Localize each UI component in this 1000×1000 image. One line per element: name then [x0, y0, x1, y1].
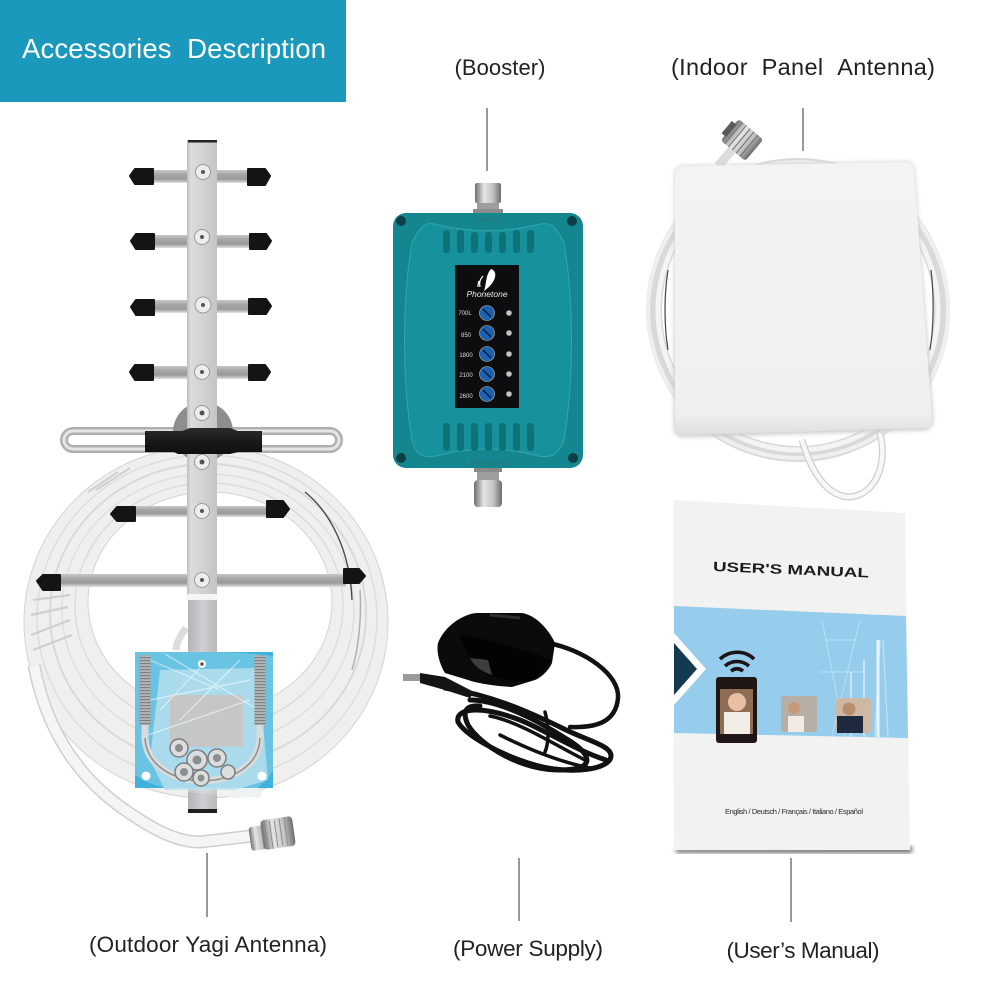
- mast zip tie: [186, 594, 218, 600]
- mounting holes: [142, 660, 266, 780]
- mounting hardware bag: [135, 650, 273, 798]
- manual photo: [836, 698, 871, 733]
- cable N connector: [248, 816, 296, 851]
- mast: [187, 140, 217, 596]
- top vents: [443, 230, 534, 253]
- adapter: [437, 613, 555, 687]
- cable coil: outdoor antenna: [24, 446, 388, 842]
- user's manual: [673, 500, 912, 853]
- power cord: [445, 643, 618, 770]
- title banner: [0, 0, 346, 102]
- dark gap: [305, 492, 352, 600]
- title banner: Accessories Description: [22, 33, 326, 64]
- phone: [716, 677, 757, 743]
- indoor panel antenna: [648, 116, 948, 497]
- manual tower pattern: [820, 620, 888, 737]
- control panel: 1800: [459, 353, 473, 359]
- label: Booster: (Booster): [454, 55, 546, 80]
- control panel: 700L: [458, 311, 472, 317]
- label: Power Supply: (Power Supply): [453, 936, 603, 961]
- yagi antenna: [37, 140, 365, 813]
- DC plug: [403, 673, 474, 698]
- manual blue band: [674, 606, 908, 738]
- control panel: 850: [461, 333, 472, 339]
- control panel: 2100: [459, 373, 473, 379]
- power supply: [403, 613, 618, 770]
- cable coil: [648, 150, 948, 497]
- bottom vents: [443, 423, 534, 451]
- tail cable: [34, 665, 252, 842]
- control panel: [455, 265, 519, 408]
- control panel: Phonetone: [466, 289, 508, 299]
- manual languages: English / Deutsch / Français / Italiano / Español: [725, 807, 863, 816]
- manual corner image: [674, 633, 706, 705]
- port labels: INDOOR: [474, 217, 502, 224]
- port labels: [470, 217, 506, 468]
- N connector: [718, 116, 763, 161]
- booster: [393, 183, 583, 507]
- mount sleeve: [145, 428, 262, 454]
- top connector: [473, 183, 503, 214]
- booster body: [393, 213, 583, 468]
- nuts: [170, 739, 235, 786]
- antenna element rods: [58, 170, 346, 587]
- plastic wrap: [31, 595, 72, 650]
- adapter gloss: [460, 634, 552, 682]
- port labels: OUTDOOR: [470, 461, 506, 468]
- control panel: 2600: [459, 394, 473, 400]
- manual photo: [781, 696, 817, 732]
- label: Outdoor Yagi Antenna: (Outdoor Yagi Antenna): [89, 932, 327, 957]
- mast bolts: [194, 164, 211, 588]
- label: User's Manual: (User’s Manual): [726, 938, 880, 963]
- label: Booster: [454, 55, 546, 171]
- rod end caps: [37, 169, 365, 590]
- wifi icon: [720, 652, 754, 671]
- bottom connector: [474, 467, 502, 507]
- label: Indoor Panel Antenna: (Indoor Panel Antenna): [671, 54, 935, 80]
- plastic film: [135, 650, 273, 797]
- u-bolt: [145, 655, 260, 725]
- driven element loop: [64, 431, 339, 449]
- mount disk: [173, 402, 233, 462]
- panel body: [674, 162, 933, 437]
- booster screw holes: [396, 216, 578, 463]
- manual heading: USER'S MANUAL: [713, 559, 869, 581]
